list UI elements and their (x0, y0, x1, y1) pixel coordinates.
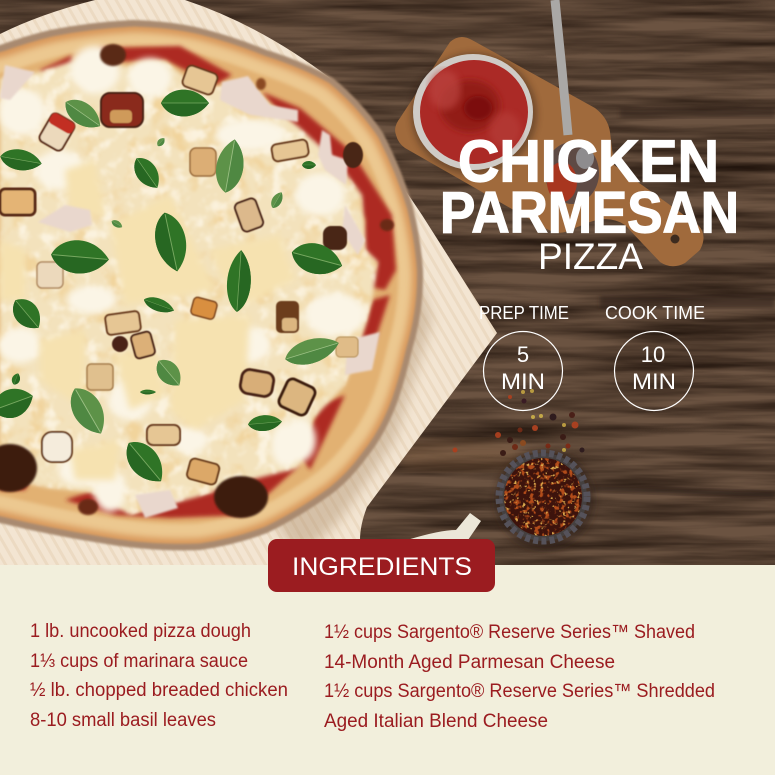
ingredient list: left column: ½ lb. chopped breaded chicken (30, 680, 288, 701)
cook time unit: MIN (632, 369, 676, 394)
ingredients heading badge: INGREDIENTS (292, 553, 472, 581)
basil leaves (0, 90, 346, 490)
ingredient list: right column: 1½ cups Sargento® Reserve Series™ Shredded (324, 681, 715, 702)
spoon (545, 0, 599, 204)
ingredients panel (0, 565, 775, 775)
cook time (605, 303, 705, 410)
prep time value: 5 (517, 342, 529, 367)
bowl of red pepper flakes (495, 450, 595, 550)
prep time label: PREP TIME (479, 303, 569, 323)
prep time unit: MIN (501, 369, 545, 394)
cutting board (395, 37, 704, 266)
ingredient list: right column: 1½ cups Sargento® Reserve Series™ Shaved (324, 622, 695, 643)
board hanging hole (670, 234, 680, 244)
prep time (479, 303, 569, 410)
wooden table background (0, 0, 775, 565)
chili flakes scattered on table (452, 389, 584, 456)
wooden pizza peel (0, 0, 497, 565)
crust (0, 20, 423, 550)
cook time value: 10 (641, 342, 665, 367)
white melted cheese patches (0, 46, 365, 512)
bowl of marinara sauce (411, 53, 537, 175)
ingredient list: left column: 1 lb. uncooked pizza dough (30, 621, 251, 642)
sauce layer (0, 46, 398, 524)
ingredients heading badge (268, 539, 495, 592)
garlic clove (407, 513, 481, 540)
ingredient list: right column (324, 622, 715, 732)
cheese layer (0, 62, 378, 515)
pink translucent parmesan shavings (0, 65, 380, 518)
title (440, 128, 739, 277)
title line: pizza: PIZZA (538, 236, 643, 277)
burnt spots (0, 44, 394, 518)
cook time circle (614, 332, 694, 410)
ingredient list: left column: 8-10 small basil leaves (30, 710, 216, 731)
ingredient list: right column: 14-Month Aged Parmesan Cheese (324, 652, 615, 673)
cook time label: COOK TIME (605, 303, 705, 323)
yellow shaved parmesan (0, 160, 295, 480)
prep time circle (484, 332, 562, 410)
pizza (0, 20, 423, 550)
ingredient list: right column: Aged Italian Blend Cheese (324, 711, 548, 732)
breaded chicken pieces (0, 64, 363, 486)
title line: chicken: CHICKEN (458, 128, 719, 194)
ingredient list: left column: 1⅓ cups of marinara sauce (30, 651, 248, 672)
ingredient list: left column (30, 621, 288, 731)
title line: parmesan: PARMESAN (440, 180, 739, 246)
